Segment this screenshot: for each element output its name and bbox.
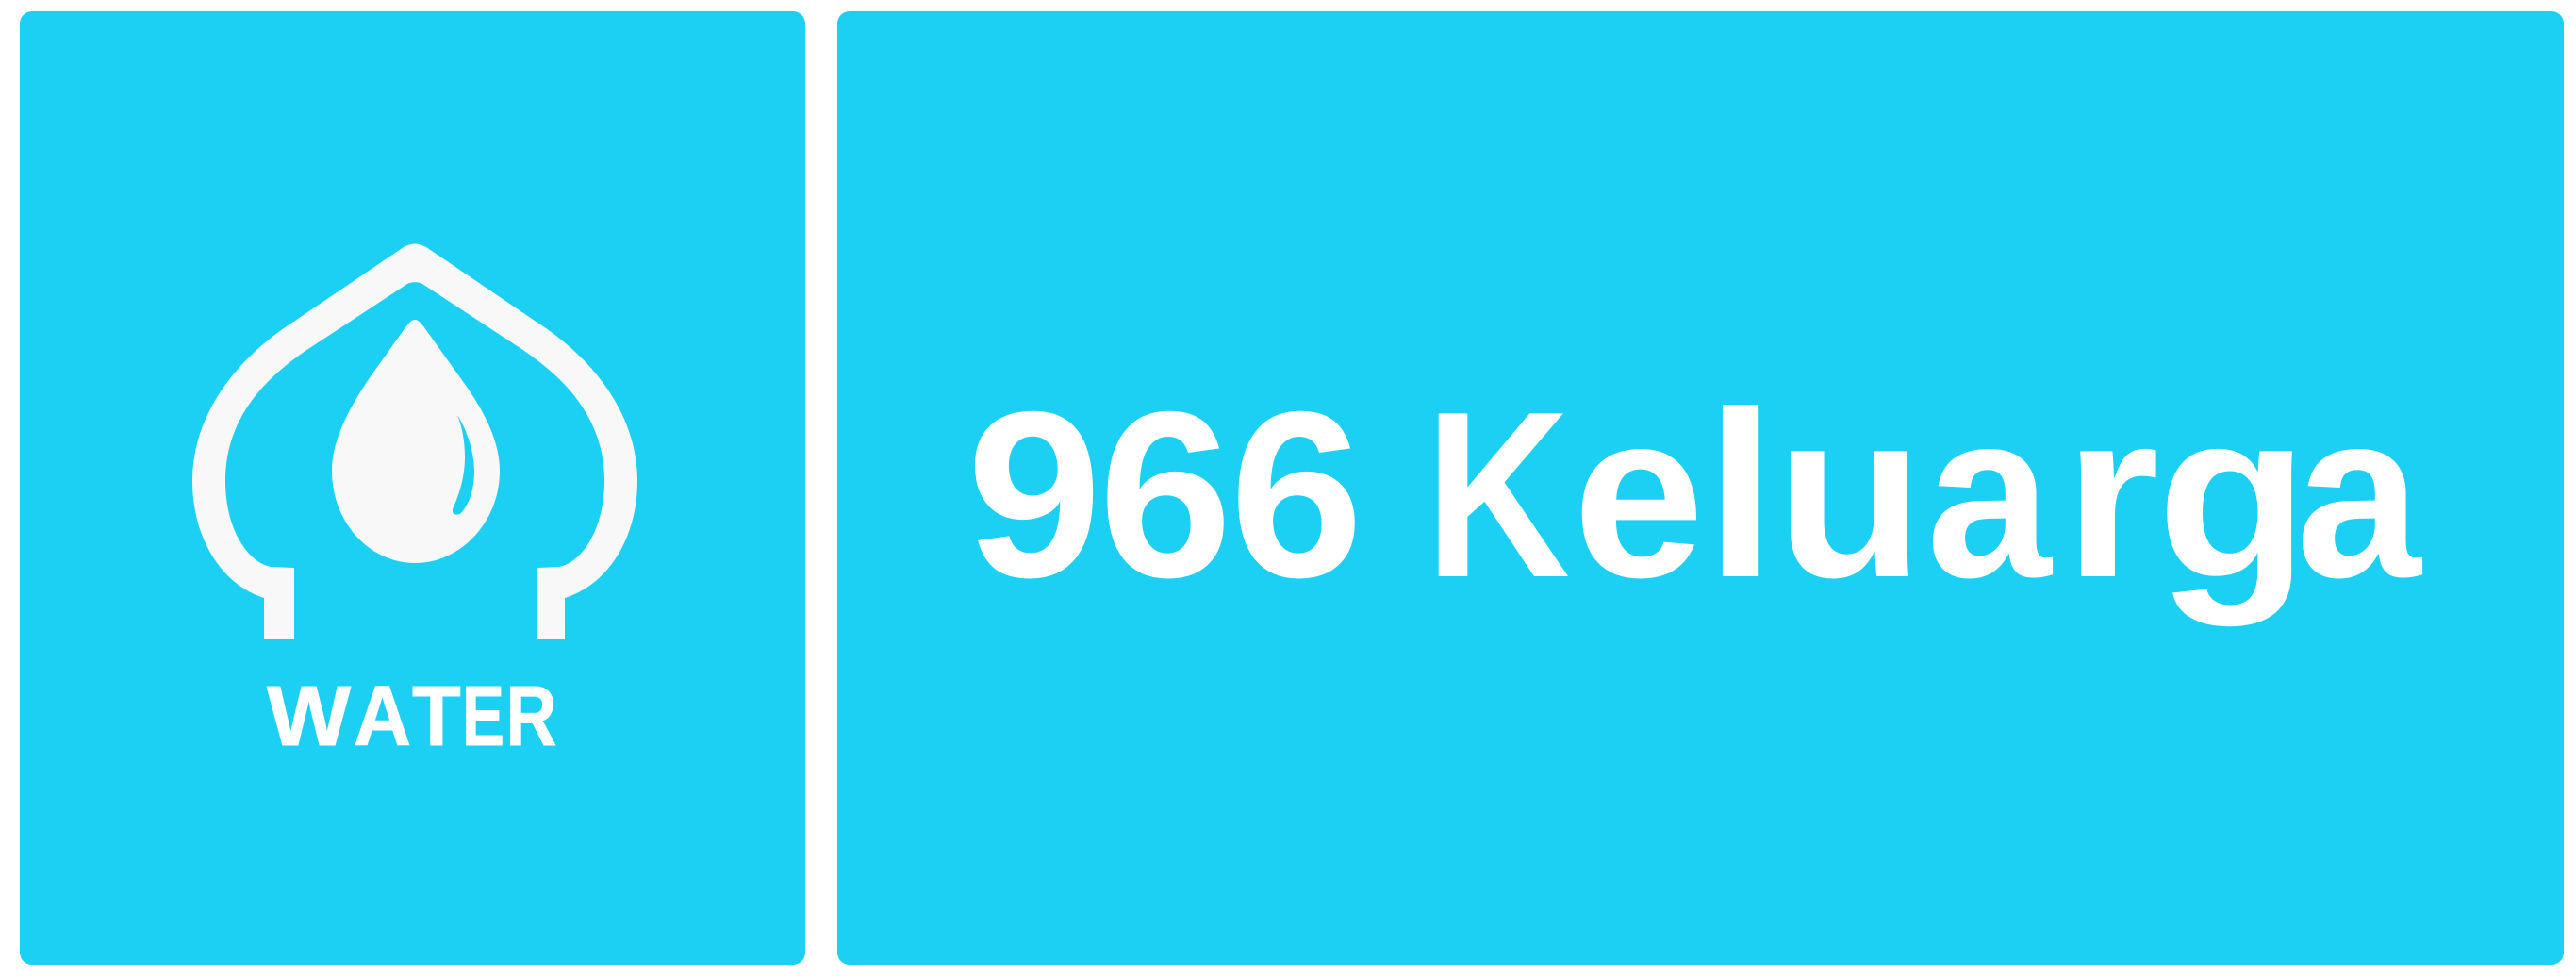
text: 966 Keluarga: g xyxy=(2157,363,2308,627)
panel: water icon xyxy=(20,11,805,965)
text: 966 Keluarga: u xyxy=(1775,363,1924,627)
text: 966 Keluarga: e xyxy=(1573,363,1705,627)
text: 966 Keluarga: K xyxy=(1426,363,1570,627)
text: 966 Keluarga: r xyxy=(2064,363,2159,627)
text: 966 Keluarga: 9 xyxy=(966,363,1102,627)
icon: water drop under arch xyxy=(192,243,637,639)
icon: arch outline xyxy=(192,243,637,639)
text: 966 Keluarga: 6 xyxy=(1230,363,1363,627)
text: 966 Keluarga: l xyxy=(1705,363,1775,627)
label: WATER: T xyxy=(412,670,461,764)
text: 966 Keluarga: a xyxy=(2296,363,2423,627)
icon: water drop xyxy=(332,320,500,563)
text: 966 Keluarga: 6 xyxy=(1098,363,1232,627)
text: 966 Keluarga: a xyxy=(1926,363,2054,627)
label: WATER: R xyxy=(505,670,556,764)
label: WATER: W xyxy=(267,670,351,764)
panel: family count xyxy=(837,11,2564,965)
label: WATER: A xyxy=(354,670,411,764)
label: WATER: E xyxy=(462,670,504,764)
